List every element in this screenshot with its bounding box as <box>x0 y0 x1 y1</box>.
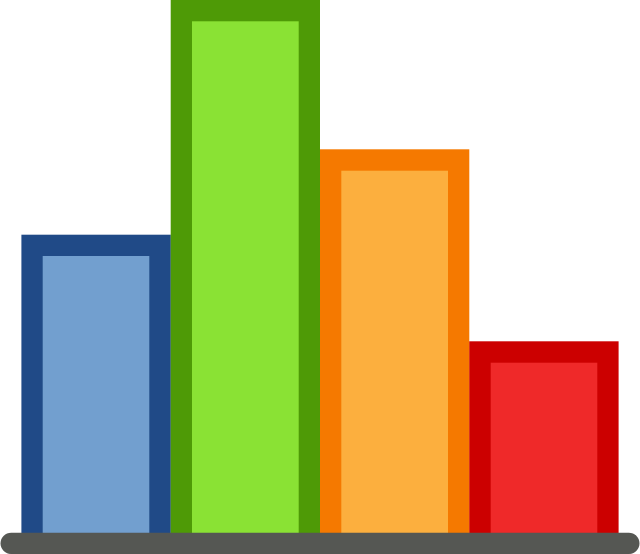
orange bar <box>320 149 469 535</box>
blue bar <box>21 235 171 535</box>
baseline axis <box>0 533 640 554</box>
green bar <box>171 0 320 534</box>
red bar <box>469 341 619 535</box>
